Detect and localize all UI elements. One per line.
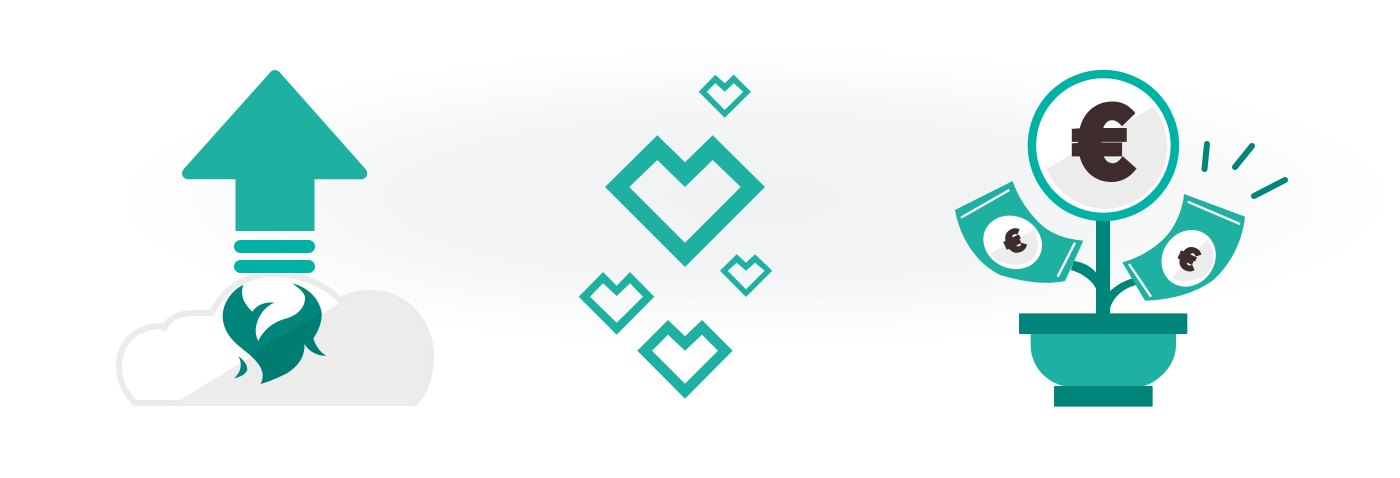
icon: coin flower — [1032, 63, 1175, 217]
infographic canvas — [116, 70, 1288, 407]
panel: rocket arrow rising from cloud — [119, 76, 431, 406]
icon: left banknote — [955, 181, 1083, 283]
text: euro sign: € — [1072, 63, 1134, 208]
icon: arrow band lower — [234, 260, 315, 273]
icon: small heart right — [720, 254, 772, 297]
background glow — [115, 48, 1395, 348]
icon: flame — [223, 283, 326, 384]
icon: right banknote — [1122, 194, 1245, 301]
panel: hearts — [579, 75, 772, 399]
icon: medium heart left — [579, 272, 654, 335]
text: euro sign left note: € — [995, 217, 1032, 265]
icon: small heart top — [699, 75, 751, 118]
icon: pot — [1019, 313, 1187, 407]
panel: money plant — [955, 63, 1285, 407]
icon: medium heart bottom — [637, 320, 733, 399]
icon: large heart — [605, 135, 765, 267]
icon: sparkle rays — [1204, 144, 1285, 196]
icon: plant stem and branches — [1071, 216, 1136, 316]
icon: arrow band upper — [234, 240, 315, 253]
icon: cloud — [119, 274, 431, 406]
icon: upward arrow — [188, 76, 361, 231]
text: euro sign right note: € — [1171, 233, 1207, 281]
